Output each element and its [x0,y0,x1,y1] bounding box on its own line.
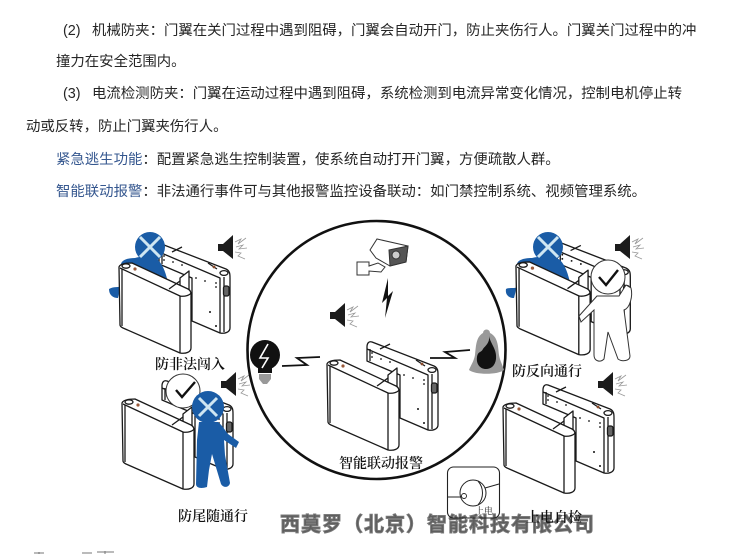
paragraph: current detection anti-pinch: 电流检测防夹：门翼在运动过程中遇到阻碍，系统检测到电流异常变化情况，控制电机停止转 [92,85,682,102]
gate front wing [503,403,575,493]
blue tailgater figure [192,391,239,488]
icon: lightning link, bulb [282,357,320,366]
gate back wing [543,385,614,473]
label: 上电自检 [526,509,582,526]
watermark: 西莫罗（北京）智能科技有限公司 [280,512,595,536]
label: 智能联动报警 [339,455,423,472]
icon: bulb [250,340,280,384]
paragraph: mechanical anti-pinch: 撞力在安全范围内。 [56,52,186,70]
icon: lightning link, bell [430,350,470,358]
panel: intelligent linkage alarm circle [248,221,506,479]
paragraph: emergency escape: 紧急逃生功能：配置紧急逃生控制装置，使系统自动打开门翼，方便疏散人群。 [56,151,560,168]
gate front wing [327,360,399,450]
panel: anti-tailgating [122,372,250,525]
icon: lightning link, camera [382,278,393,318]
icon: security camera [357,239,408,275]
gate back wing [162,381,233,469]
alarm speaker icon [218,235,247,259]
panel: anti-illegal entry [109,232,247,373]
panel: anti-reverse passage [506,232,644,380]
inset: power connector: 上电 [475,505,493,516]
gate front wing [516,262,590,355]
alarm speaker icon [221,372,250,396]
label: 防尾随通行 [178,509,248,525]
white passer with check [579,260,632,361]
blue reverse walker figure [506,232,570,298]
paragraph: mechanical anti-pinch: (2) [63,23,81,39]
paragraph: mechanical anti-pinch [56,22,696,70]
alarm speaker icon [615,235,644,259]
paragraph: current detection anti-pinch: (3) [63,86,81,102]
icon: speaker [330,303,359,327]
text block: anti-pinch and linkage description [26,22,696,200]
gate back wing [159,245,230,333]
paragraph: intelligent linkage alarm: 智能联动报警：非法通行事件可与其他报警监控设备联动：如门禁控制系统、视频管理系统。 [56,183,646,200]
gate back wing [367,342,438,430]
gate back wing [557,243,630,334]
blue intruder figure [109,232,168,298]
label: 防非法闯入 [155,356,225,373]
paragraph: current detection anti-pinch: 动或反转，防止门翼夹伤行人。 [26,118,227,135]
white passer with check [166,374,200,408]
alarm speaker icon [598,372,627,396]
icon: fire alarm bell [469,330,504,374]
circle frame [248,221,506,479]
gate front wing [122,399,194,489]
paragraph: current detection anti-pinch [26,85,682,135]
inset: power connector [448,467,500,518]
clipped next heading fragment [34,551,114,554]
panel: power-on self check [448,372,627,526]
paragraph: mechanical anti-pinch: 机械防夹：门翼在关门过程中遇到阻碍，门翼会自动开门，防止夹伤行人。门翼关门过程中的冲 [92,22,696,39]
label: 防反向通行 [512,364,582,380]
gate front wing [119,263,191,353]
